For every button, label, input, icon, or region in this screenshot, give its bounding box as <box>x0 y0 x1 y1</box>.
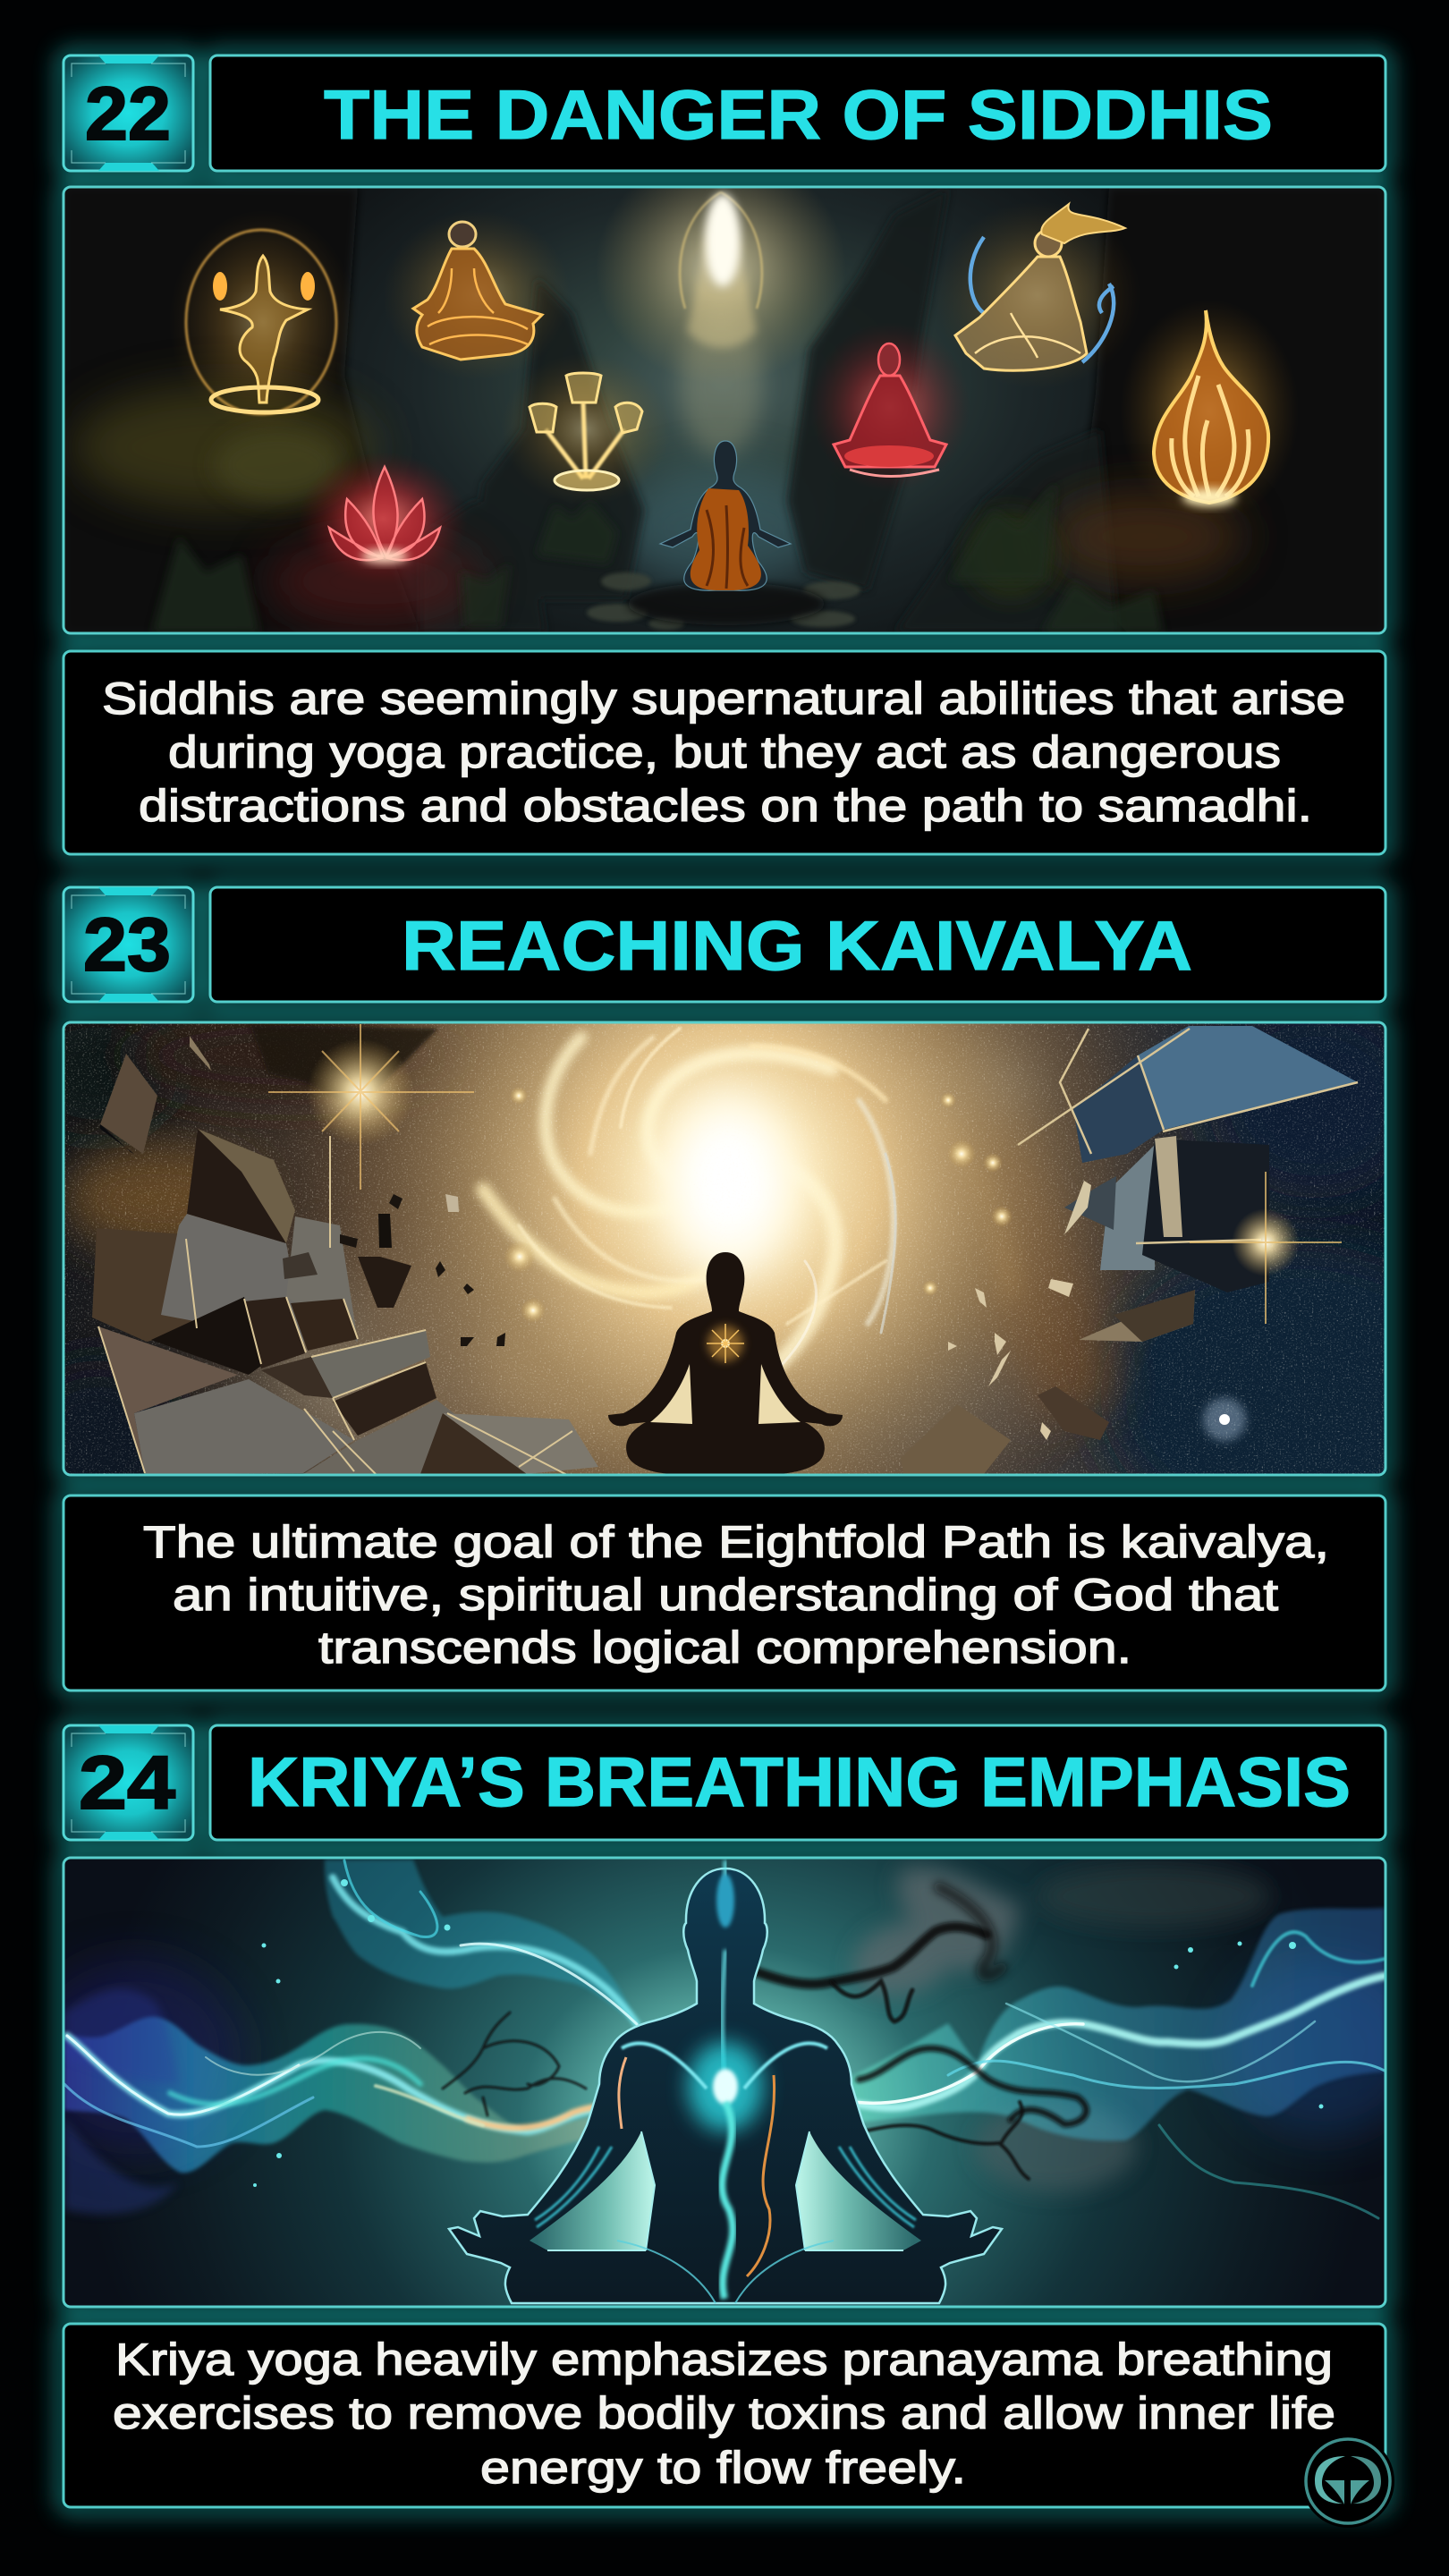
text panel: siddhis description: during yoga practice, but they act as dangerous <box>168 727 1281 777</box>
title bar: Reaching Kaivalya <box>210 887 1385 1002</box>
vision: central radiant being <box>605 188 837 461</box>
right panels and rocks <box>901 1026 1358 1474</box>
number badge 23 <box>64 887 193 1002</box>
text panel: kriya description: exercises to remove bodily toxins and allow inner life <box>113 2388 1335 2438</box>
vision: goddess in orb <box>182 225 343 417</box>
text panel: kriya description: Kriya yoga heavily emphasizes pranayama breathing <box>115 2334 1333 2385</box>
text panel: kaivalya description: transcends logical comprehension. <box>318 1623 1131 1673</box>
dark cliffs and trunks <box>270 191 1208 535</box>
left shards and slabs <box>92 1025 598 1476</box>
illustration: silhouette before golden spiral galaxy with shattering slabs <box>64 1023 1385 1474</box>
title bar: Kriya's Breathing Emphasis: KRIYA’S BREATHING EMPHASIS <box>248 1742 1351 1821</box>
text panel: siddhis description: Siddhis are seemingly supernatural abilities that arise <box>102 674 1345 724</box>
illustration frame <box>64 187 1385 633</box>
vision: red monk <box>819 332 961 483</box>
foreground meditating monk in orange robe <box>628 441 825 625</box>
text panel: kriya description <box>64 2324 1385 2507</box>
illustration: yogi surrounded by glowing siddhi visions in a dark forest <box>64 152 1385 632</box>
dark toxic smoke wisps <box>443 1887 1086 2179</box>
text panel: kaivalya description: The ultimate goal of the Eightfold Path is kaivalya, <box>143 1517 1329 1567</box>
illustration frame <box>64 1858 1385 2307</box>
vision: red lotus <box>306 458 460 578</box>
lens flare stars <box>268 1024 1342 1441</box>
title bar: Reaching Kaivalya: REACHING KAIVALYA <box>402 906 1192 985</box>
title bar: The Danger of Siddhis: THE DANGER OF SIDDHIS <box>324 75 1273 154</box>
floating sparks <box>253 1879 1324 2187</box>
number badge 23: 23 <box>83 902 171 987</box>
star field <box>64 1023 1385 1474</box>
grey smoke clouds <box>854 1865 1270 2191</box>
text panel: siddhis description <box>64 651 1385 854</box>
meditating silhouette <box>608 1252 843 1474</box>
text panel: kriya description: energy to flow freely. <box>480 2443 966 2493</box>
vision: flame <box>1129 309 1290 513</box>
vision: golden chalices <box>514 365 656 494</box>
ground stones <box>587 572 860 630</box>
meditating body <box>449 1860 1002 2303</box>
number badge 24: 24 <box>79 1741 175 1825</box>
vision: blue and gold water spirit <box>952 201 1127 374</box>
title bar: The Danger of Siddhis <box>210 55 1385 171</box>
title bar: Kriya's Breathing Emphasis <box>210 1725 1385 1840</box>
ferns <box>154 499 1162 631</box>
number badge 22: 22 <box>85 72 171 156</box>
text panel: siddhis description: distractions and obstacles on the path to samadhi. <box>139 781 1312 831</box>
number badge 22 <box>64 55 193 171</box>
gold dust arm <box>877 1046 1064 1413</box>
number badge 24 <box>64 1725 193 1840</box>
icon: round logo badge <box>1301 2435 1394 2528</box>
illustration: glowing figure with pranayama energy streams and dark smoke <box>27 1859 1422 2306</box>
spiral galaxy <box>264 767 1194 1590</box>
energy streams: left band <box>64 1860 1385 2218</box>
text panel: kaivalya description: an intuitive, spiritual understanding of God that <box>173 1570 1278 1620</box>
illustration frame <box>64 1022 1385 1475</box>
vision: floating golden monk <box>397 220 556 367</box>
energy streams: upper left band <box>325 1860 637 2024</box>
text panel: kaivalya description <box>64 1496 1385 1690</box>
energy streams: right band <box>835 1908 1385 2140</box>
